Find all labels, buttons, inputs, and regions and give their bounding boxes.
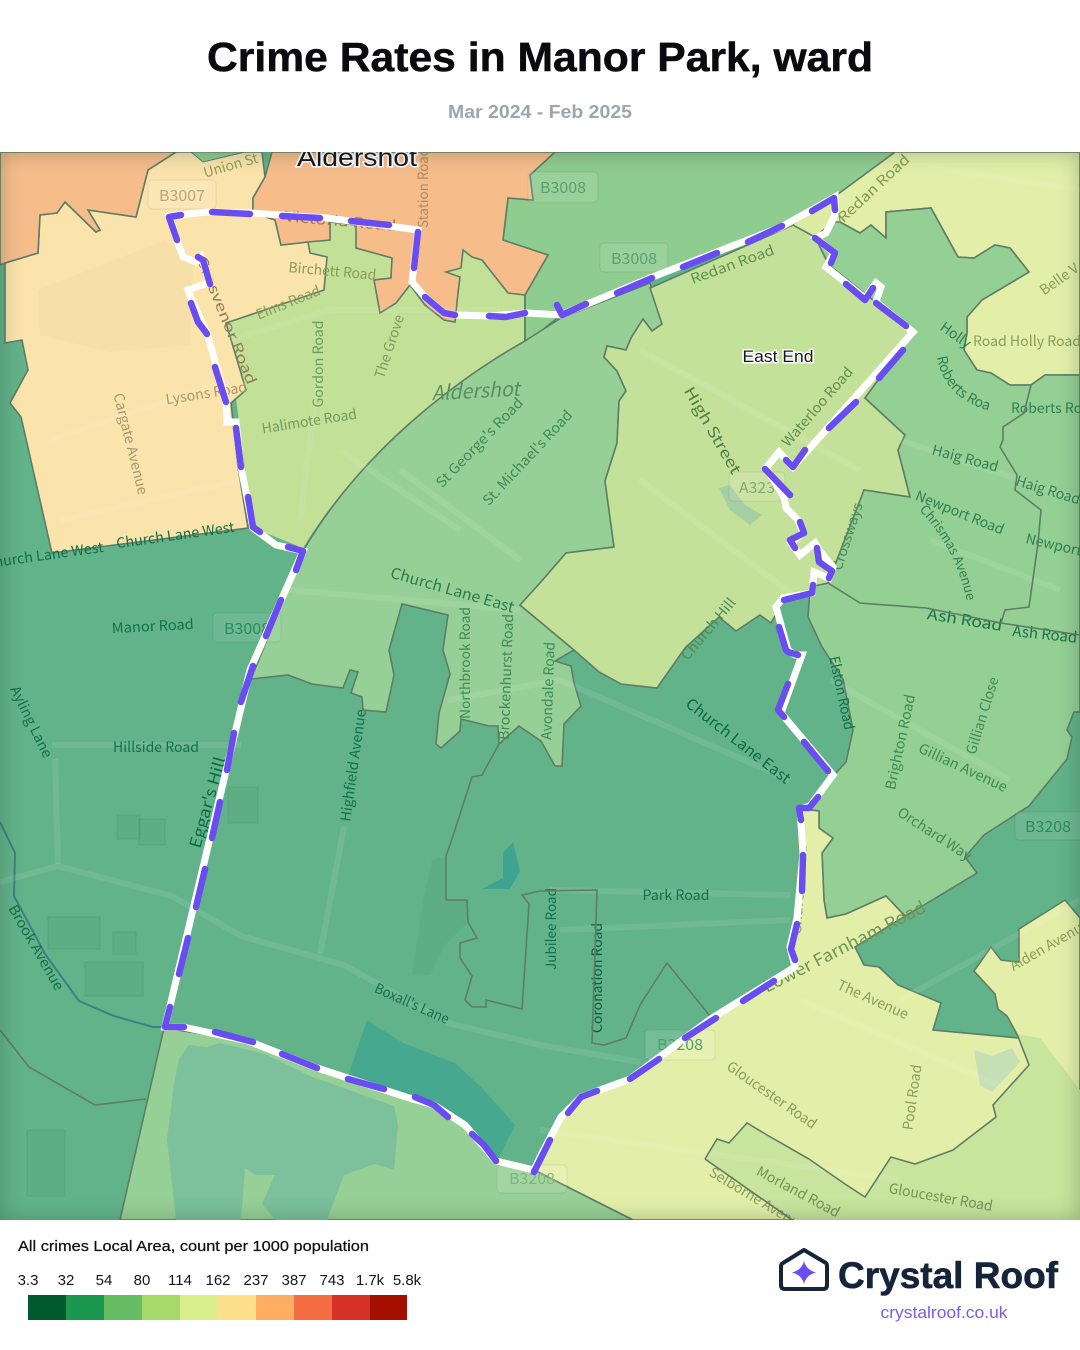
- road labels: The Avenue: [834, 975, 912, 1024]
- logo wordmark: Crystal Roof: [838, 1255, 1059, 1296]
- road labels: Waterloo Road: [777, 362, 858, 451]
- ward boundary: purple dashes: [165, 198, 906, 1172]
- region: east mid-green Holly and Gillian: [805, 208, 1080, 918]
- legend scale values: 54: [96, 1272, 112, 1289]
- road labels: Lysons Road: [164, 377, 248, 409]
- legend scale values: 114: [168, 1272, 192, 1289]
- legend scale values: 1.7k: [356, 1272, 385, 1289]
- road labels: Union St: [201, 148, 261, 183]
- region: lake teal: [348, 1020, 515, 1161]
- road labels: Manor Road: [111, 614, 194, 638]
- road labels: Church Lane West: [115, 517, 236, 553]
- road labels: Ash Road: [926, 603, 1004, 636]
- road labels: Selborne Avenue: [705, 1162, 810, 1236]
- road labels: Holly: [936, 317, 976, 353]
- title: Crime Rates in Manor Park, ward: [207, 34, 873, 80]
- road labels: Church Lane East: [388, 562, 517, 618]
- legend scale values: 3.3: [18, 1272, 38, 1289]
- road labels: Aldershot: [431, 373, 523, 406]
- logo url: crystalroof.co.uk: [880, 1304, 1008, 1322]
- road label: B3007: B3007: [159, 185, 205, 206]
- legend scale values: 387: [281, 1272, 307, 1289]
- road labels: Avondale Road: [536, 642, 560, 740]
- road labels: Station Road: [413, 148, 433, 228]
- legend scale values: 237: [243, 1272, 269, 1289]
- road labels: Gillian Avenue: [915, 738, 1011, 797]
- road labels: Halimote Road: [260, 404, 358, 438]
- legend scale values: [18, 1272, 422, 1289]
- road labels: Morland Road: [753, 1161, 844, 1222]
- region: St George's mid-green: [251, 283, 662, 766]
- road label: B3008 north: B3008: [540, 177, 586, 198]
- road labels: St. Michael's Road: [478, 405, 577, 510]
- road labels: Elms Road: [253, 280, 323, 324]
- map: crime rate choropleth: [0, 152, 1080, 1220]
- road labels: Gloucester Road: [723, 1056, 821, 1133]
- legend title: All crimes Local Area, count per 1000 population: [18, 1238, 369, 1255]
- water: park pond: [482, 842, 520, 889]
- icon: house with star: [781, 1250, 827, 1289]
- region: small green tip Union Street: [191, 152, 245, 162]
- legend: [18, 1238, 422, 1320]
- region: southern pale yellow-green: [534, 809, 1080, 1220]
- road label: B3008 Eggar's Hill: [213, 613, 281, 642]
- road labels: Newport Road: [913, 485, 1007, 539]
- region: Morland and Gloucester lime: [705, 1034, 1080, 1222]
- region: recreation ground: [167, 1043, 398, 1220]
- road label: B3208 east: B3208: [1025, 816, 1071, 837]
- road label: B3008 north: [528, 172, 598, 202]
- road labels: Brook Avenue: [4, 901, 69, 994]
- legend colour bar: [28, 1295, 407, 1320]
- park: woodland shading south: [412, 856, 468, 975]
- road labels: Gillian Close: [961, 674, 1004, 757]
- road labels: Victoria Road: [284, 206, 397, 236]
- road label: B3208 centre: [645, 1030, 715, 1060]
- water: brook: [0, 822, 165, 1027]
- region: Redan triangle: [794, 204, 840, 236]
- place label: East End: East End: [742, 347, 814, 366]
- road labels: Church Hill: [676, 593, 740, 664]
- ward boundary: white outline: [165, 197, 913, 1170]
- road labels: Pool Road: [898, 1063, 927, 1131]
- road labels: Ayling Lane: [5, 682, 58, 761]
- road labels: Brockenhurst Road: [494, 614, 518, 740]
- road label: A323: [729, 472, 785, 501]
- road labels: Gloucester Road: [887, 1178, 994, 1216]
- road labels: Hillside Road: [113, 737, 199, 757]
- road labels: Crossways: [827, 500, 868, 573]
- logo: Crystal Roof: [781, 1250, 1059, 1322]
- region: East End lime: [520, 225, 913, 688]
- region: Orange west: [0, 152, 176, 265]
- water: East End pond: [719, 485, 762, 525]
- road label: B3008 Redan: [600, 243, 668, 272]
- region: Grosvenor yellow: [5, 152, 327, 553]
- region: Halimote lime: [226, 212, 540, 548]
- road labels: Eggar's Hill: [182, 754, 231, 851]
- region: north mid-green Redan: [503, 152, 895, 341]
- subtitle: date range: Mar 2024 - Feb 2025: [448, 102, 632, 122]
- road label: B3208 centre: B3208: [657, 1034, 703, 1055]
- road label: B3208 south: [497, 1165, 567, 1193]
- road labels: Cargate Avenue: [109, 391, 153, 497]
- road labels: Jubilee Road: [541, 888, 561, 970]
- road labels: Boxall's Lane: [371, 978, 453, 1029]
- road labels: Ash Road: [1011, 620, 1078, 648]
- road label: B3208 south: B3208: [509, 1168, 555, 1189]
- road label: B3007: [148, 180, 216, 209]
- road labels: Birchett Road: [288, 257, 377, 285]
- region: south park mid-green: [120, 1028, 633, 1220]
- road labels: Coronation Road: [587, 923, 607, 1033]
- road labels: High Street: [679, 383, 747, 478]
- water: southern pond: [974, 1048, 1020, 1092]
- road labels: Gordon Road: [308, 320, 328, 408]
- road labels: Chrismas Avenue: [921, 506, 974, 600]
- road labels: The Grove: [370, 312, 409, 381]
- road label: B3208 east: [1015, 812, 1080, 840]
- road labels: Lower Farnham Road: [758, 893, 929, 997]
- legend scale values: 162: [205, 1272, 231, 1289]
- road labels: Orchard Way: [894, 802, 976, 866]
- road labels: Church Lane East: [681, 693, 796, 789]
- road labels: Road Holly Road: [973, 331, 1080, 351]
- road labels: Park Road: [642, 885, 710, 905]
- road labels: St George's Road: [431, 393, 528, 492]
- road label: B3008 Eggar's Hill: B3008: [224, 618, 270, 639]
- road label: B3008 Redan: B3008: [611, 248, 657, 269]
- road labels: Elston Road: [824, 654, 859, 732]
- road labels: Redan Road: [833, 150, 914, 227]
- place label: Aldershot town: Aldershot: [297, 144, 417, 172]
- road labels: Northbrook Road: [455, 607, 475, 719]
- legend scale values: 743: [319, 1272, 345, 1289]
- legend scale values: 5.8k: [393, 1272, 422, 1289]
- road labels: Church Road: [786, 844, 812, 935]
- road labels: Redan Road: [688, 240, 777, 289]
- region: top-right pale yellow-green area: [834, 152, 1080, 385]
- internal ward boundary lines: [0, 295, 1080, 1222]
- road labels: Grosvenor Road: [192, 253, 262, 387]
- legend scale values: 32: [58, 1272, 74, 1289]
- road labels: Brighton Road: [880, 692, 920, 791]
- road labels: Haig Road: [930, 440, 1001, 477]
- region: Orange town centre: [253, 152, 555, 322]
- road label: A323: A323: [739, 477, 775, 498]
- road labels: Highfield Avenue: [335, 708, 371, 823]
- legend scale values: 80: [134, 1272, 150, 1289]
- park: Manor Park shading: [38, 240, 193, 352]
